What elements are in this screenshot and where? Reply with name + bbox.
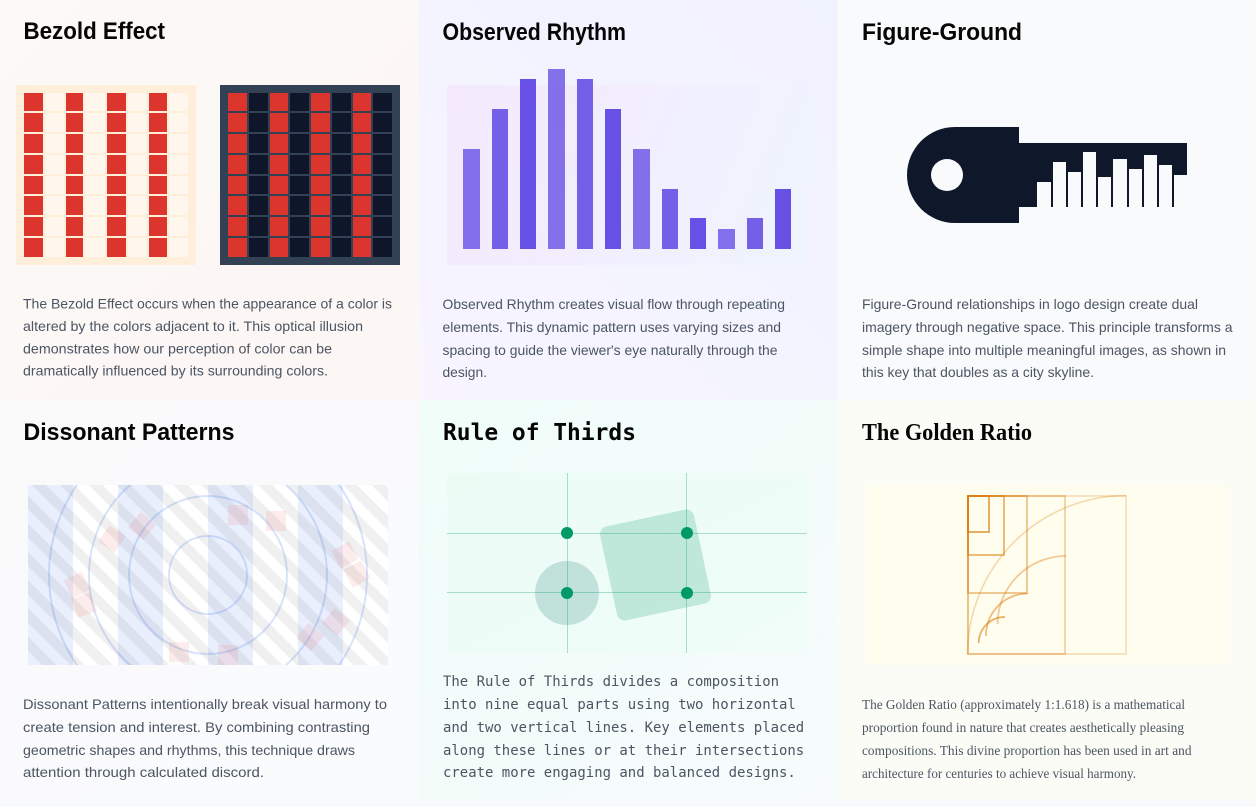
heading: The Golden Ratio: The Golden Ratio	[862, 420, 1032, 446]
description: Observed Rhythm: elements. This dynamic pattern uses varying sizes and	[442, 319, 781, 335]
description: Dissonant Patterns	[23, 696, 387, 780]
description: The Golden Ratio: architecture for centuries to achieve visual harmony.	[862, 766, 1136, 781]
heading: Rule of Thirds: Rule of Thirds	[443, 420, 636, 446]
panel: Bezold Effect	[0, 0, 419, 400]
illustration: thirds grid with shapes	[447, 473, 807, 653]
description: Observed Rhythm: spacing to guide the viewer's eye naturally through the	[442, 342, 778, 358]
illustration: clashing stripes, rings and squares	[28, 485, 388, 665]
description: Bezold Effect	[23, 296, 392, 378]
heading: Figure-Ground: Figure-Ground	[862, 19, 1022, 46]
description: Dissonant Patterns: geometric shapes and rhythms, this technique draws	[23, 742, 355, 758]
description: Figure-Ground: simple shape into multiple meaningful images, as shown in	[862, 342, 1226, 358]
illustration: red stripes on navy	[220, 85, 400, 265]
description: Rule of Thirds: create more engaging and balanced designs.	[443, 765, 796, 781]
description: The Golden Ratio: proportion found in nature that creates aesthetically pleasing	[862, 720, 1184, 735]
shape: rotated square	[599, 508, 712, 622]
description: Rule of Thirds: and two vertical lines. Key elements placed	[443, 720, 804, 736]
description: Figure-Ground	[862, 296, 1233, 380]
description: Rule of Thirds: into nine equal parts using two horizontal	[443, 697, 796, 713]
illustration: golden ratio rectangles and spiral	[867, 485, 1227, 665]
panel: Observed Rhythm	[419, 0, 837, 400]
shape: circle	[535, 561, 599, 625]
panel: Rule of Thirds	[419, 400, 837, 800]
description: Figure-Ground: this key that doubles as a city skyline.	[862, 364, 1094, 380]
heading: Observed Rhythm: Observed Rhythm	[442, 19, 626, 46]
description: Rule of Thirds: along these lines or at their intersections	[443, 743, 804, 759]
description: Bezold Effect: demonstrates how our perception of color can be	[23, 340, 332, 356]
heading: Dissonant Patterns: Dissonant Patterns	[24, 419, 234, 446]
description: Bezold Effect: The Bezold Effect occurs when the appearance of a color is	[23, 296, 392, 312]
description: Dissonant Patterns: create tension and interest. By combining contrasting	[23, 719, 370, 735]
description: Bezold Effect: dramatically influenced by its surrounding colors.	[23, 362, 328, 378]
heading: Bezold Effect: Bezold Effect	[24, 18, 165, 45]
description: Observed Rhythm: design.	[442, 364, 487, 380]
panel: The Golden Ratio	[837, 400, 1256, 800]
description: Figure-Ground: imagery through negative space. This principle transforms a	[862, 319, 1233, 335]
description: Rule of Thirds	[443, 674, 804, 781]
description: Bezold Effect: altered by the colors adjacent to it. This optical illusion	[23, 318, 363, 334]
bar chart: rhythm bars	[447, 69, 807, 265]
description: Rule of Thirds: The Rule of Thirds divides a composition	[443, 674, 779, 690]
description: Figure-Ground: Figure-Ground relationships in logo design create dual	[862, 296, 1198, 312]
description: Dissonant Patterns: attention through calculated discord.	[23, 764, 264, 780]
description: Dissonant Patterns: Dissonant Patterns intentionally break visual harmony to	[23, 696, 387, 712]
description: Observed Rhythm: Observed Rhythm creates visual flow through repeating	[442, 296, 785, 312]
icon: key with city skyline teeth	[907, 127, 1187, 223]
intersection points	[561, 527, 693, 599]
panel: Figure-Ground	[837, 0, 1256, 400]
description: The Golden Ratio	[862, 697, 1192, 781]
panel: Dissonant Patterns	[24, 422, 388, 780]
description: The Golden Ratio: compositions. This divine proportion has been used in art and	[862, 743, 1192, 758]
description: Observed Rhythm	[442, 296, 785, 380]
description: The Golden Ratio: The Golden Ratio (approximately 1:1.618) is a mathematical	[862, 697, 1185, 712]
spiral arcs	[968, 496, 1126, 654]
illustration: red stripes on cream	[16, 85, 196, 265]
